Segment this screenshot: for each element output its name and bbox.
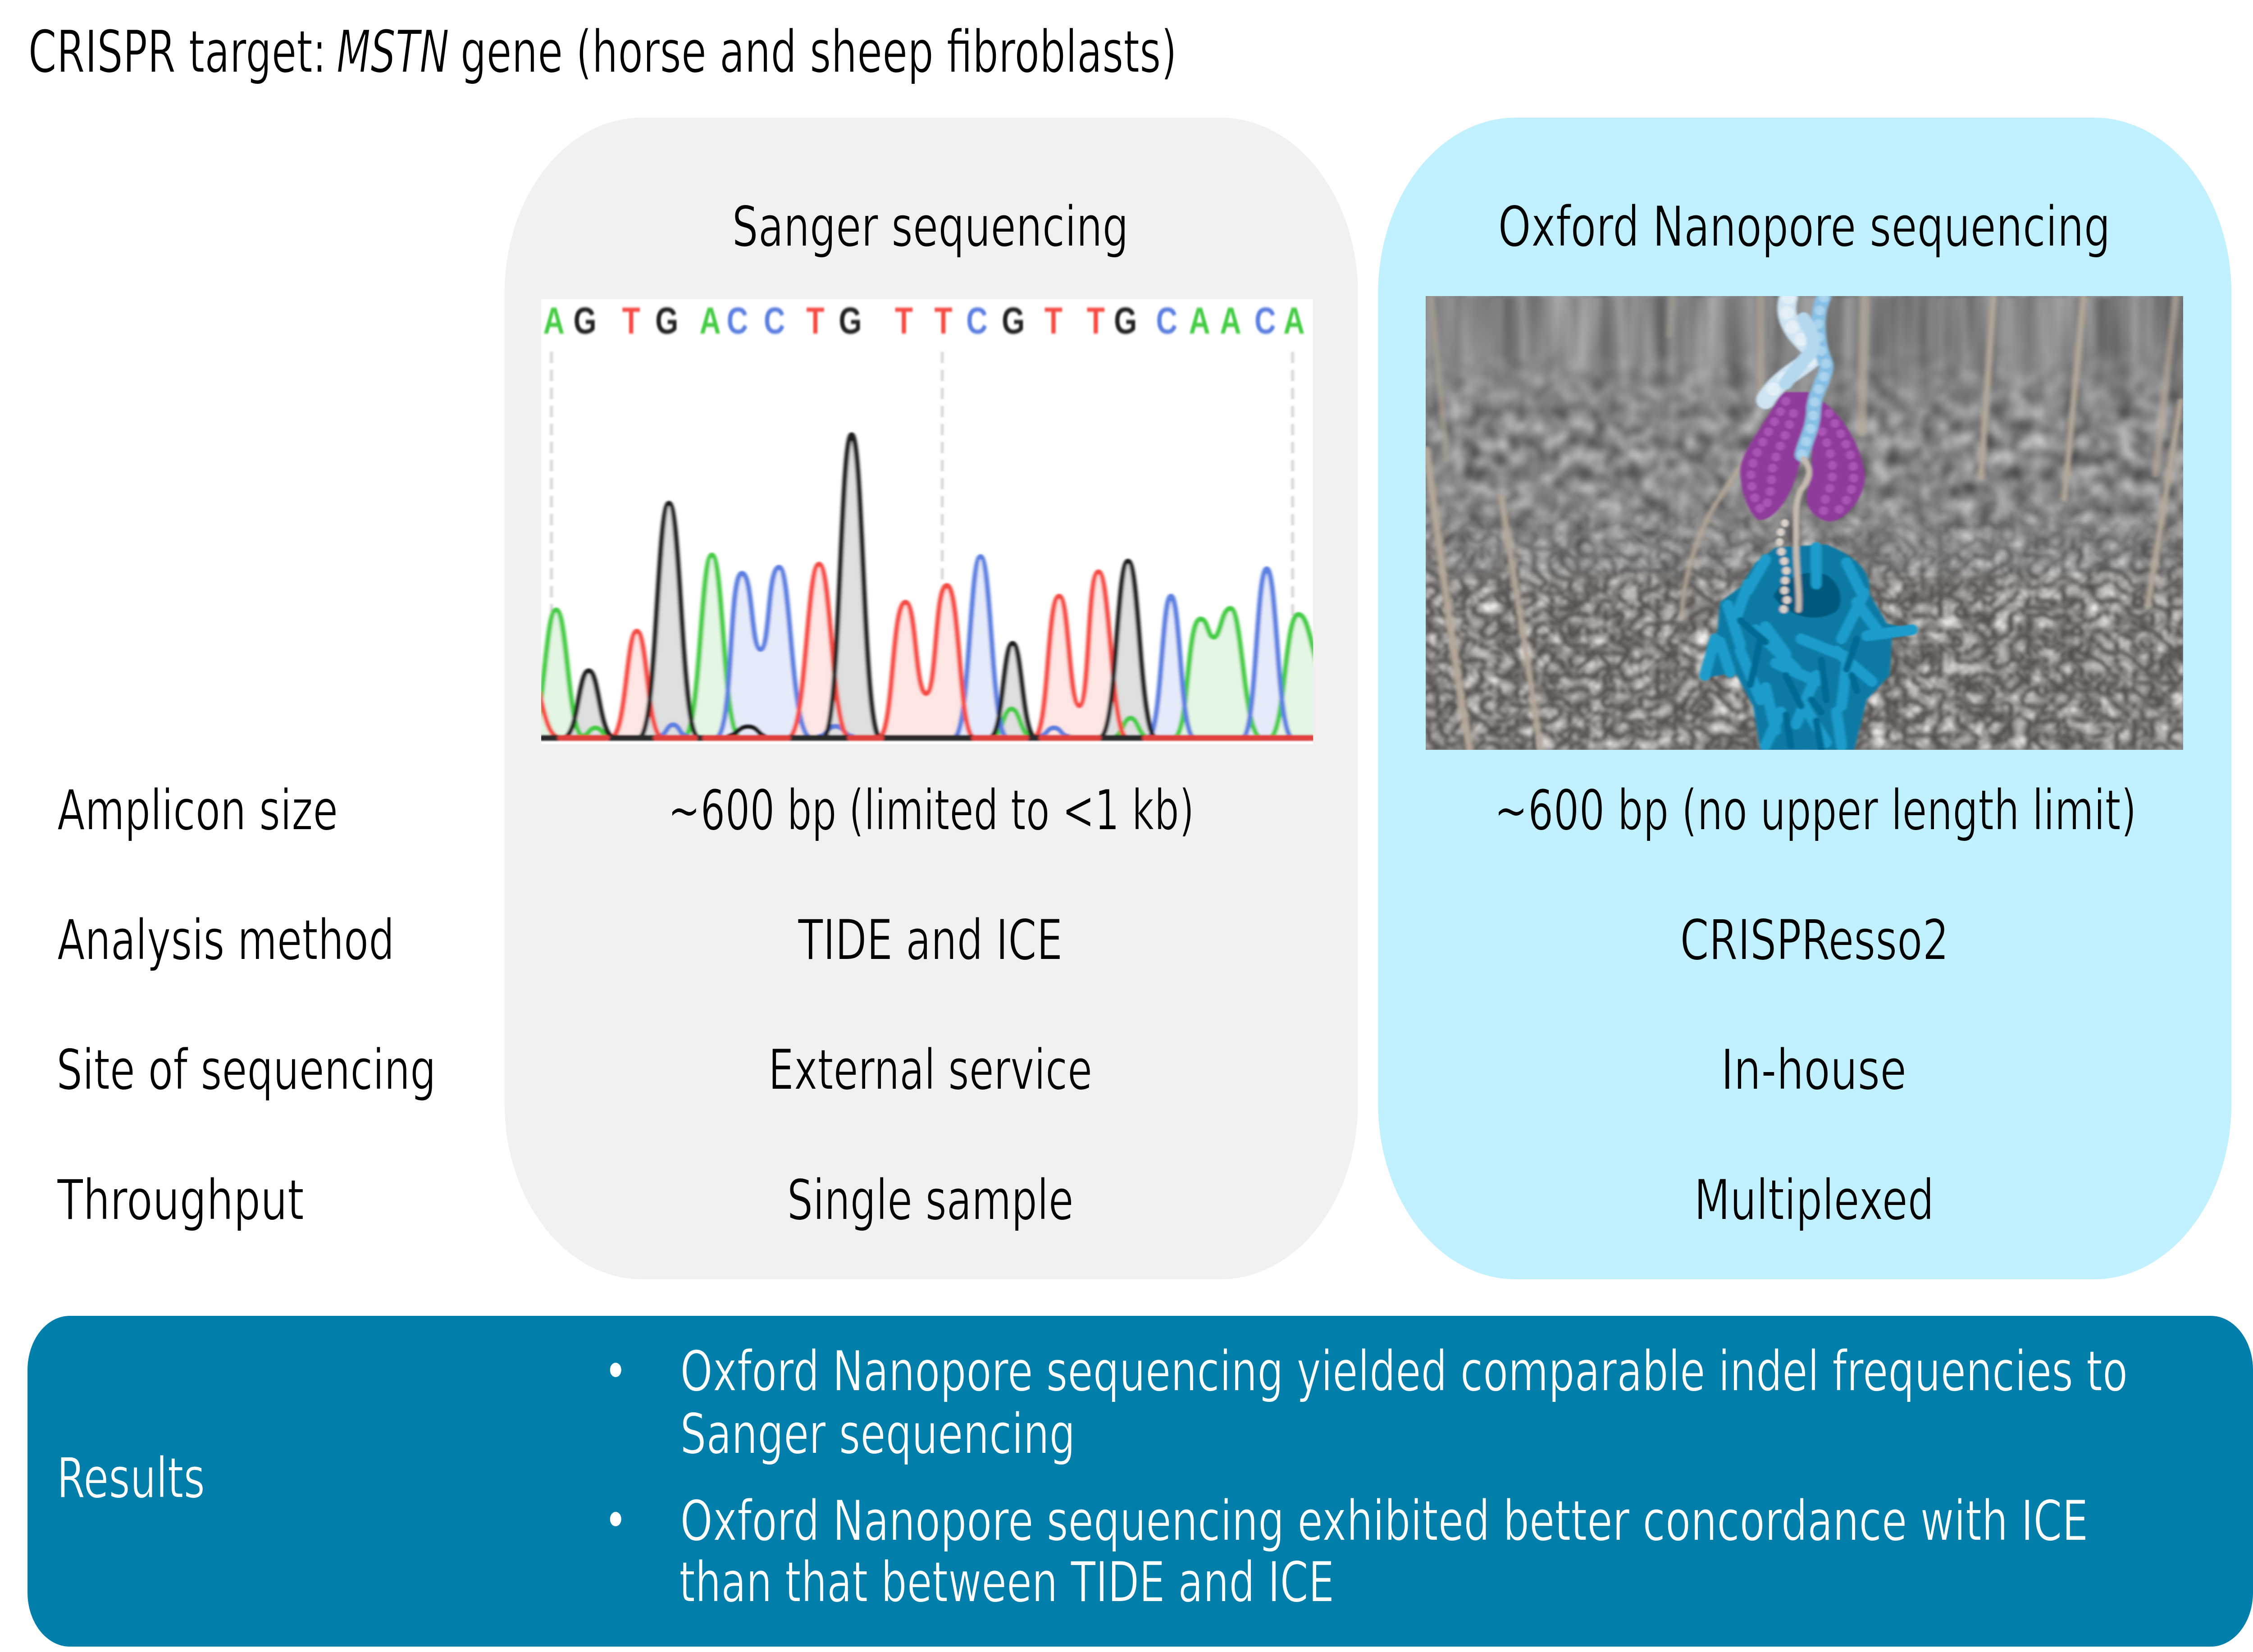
peak traces — [528, 352, 1321, 738]
image: nanopore illustration — [1426, 296, 2183, 750]
row labels — [56, 778, 436, 1233]
DNA: single strand through pore — [1779, 459, 1809, 610]
base call letters: T — [895, 299, 913, 342]
value: throughput Nanopore: Multiplexed — [1694, 1168, 1934, 1233]
base call letters: G — [1002, 299, 1025, 342]
base call letters: A — [1189, 299, 1210, 342]
base call letters: G — [574, 299, 597, 342]
bullet: better concordance with ICE: Oxford Nanopore sequencing exhibited better concordance with ICE — [680, 1489, 2088, 1554]
base call letters: C — [1156, 299, 1177, 342]
value: site Nanopore: In-house — [1721, 1038, 1906, 1103]
value: analysis Sanger: TIDE and ICE — [798, 908, 1063, 973]
value: site Sanger: External service — [768, 1038, 1092, 1103]
panel: Oxford Nanopore sequencing — [1378, 118, 2231, 1279]
value: analysis Nanopore: CRISPResso2 — [1680, 908, 1949, 973]
membrane strands — [1427, 298, 2181, 748]
base call letters: G — [839, 299, 862, 342]
base call letters: C — [764, 299, 785, 342]
title — [28, 18, 1177, 86]
base call letters: G — [655, 299, 678, 342]
base call letters: A — [1220, 299, 1241, 342]
title: gene (horse and sheep fibroblasts) — [461, 18, 1177, 86]
base call letters: T — [935, 299, 953, 342]
base call letters: A — [699, 299, 721, 342]
DNA: double helix — [1765, 298, 1826, 455]
base call letters: T — [806, 299, 825, 342]
protein: purple motor — [1740, 392, 1865, 521]
base call letters: C — [1254, 299, 1276, 342]
bullet: comparable indel frequencies — [610, 1339, 2128, 1467]
bullet: comparable indel frequencies: Sanger sequencing — [680, 1402, 1075, 1467]
value: throughput Sanger: Single sample — [787, 1168, 1074, 1233]
base call letters: C — [727, 299, 748, 342]
panel: Sanger sequencing — [505, 118, 1358, 1279]
value: amplicon size Sanger: ~600 bp (limited to <1 kb) — [668, 778, 1194, 843]
label: site of sequencing: Site of sequencing — [56, 1038, 436, 1103]
bullet: better concordance with ICE — [610, 1489, 2088, 1615]
base call letters: T — [1087, 299, 1105, 342]
pore: blue protein — [1702, 544, 1917, 750]
label: amplicon size: Amplicon size — [57, 778, 338, 843]
base call letters: C — [966, 299, 988, 342]
base call letters: T — [1044, 299, 1063, 342]
base call letters: G — [1114, 299, 1137, 342]
base call letters: T — [622, 299, 640, 342]
label: throughput: Throughput — [57, 1168, 304, 1233]
bullet: comparable indel frequencies: Oxford Nanopore sequencing yielded comparable indel frequencies to — [680, 1339, 2128, 1404]
heading: Sanger sequencing: Sanger sequencing — [732, 195, 1129, 260]
panel: Results — [27, 1316, 2253, 1647]
heading: Oxford Nanopore sequencing: Oxford Nanopore sequencing — [1498, 195, 2111, 260]
bullet: better concordance with ICE: than that between TIDE and ICE — [679, 1550, 1334, 1615]
value: amplicon size Nanopore: ~600 bp (no upper length limit) — [1494, 778, 2137, 843]
base call letters: A — [1283, 299, 1305, 342]
chart: sequencing chromatogram — [528, 299, 1321, 744]
heading: Results: Results — [57, 1446, 205, 1511]
label: analysis method: Analysis method — [57, 908, 394, 973]
base call letters: A — [543, 299, 565, 342]
title: MSTN — [337, 18, 449, 86]
title: CRISPR target: — [28, 18, 326, 86]
